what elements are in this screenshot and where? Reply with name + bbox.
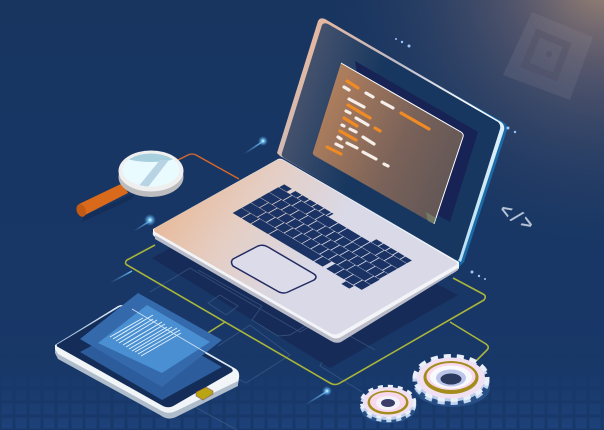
code lines orange: [327, 81, 429, 154]
tablet screen: [57, 307, 233, 407]
lens rim: [118, 150, 184, 197]
tablet body: [55, 305, 239, 416]
laptop deck: [154, 160, 457, 334]
yellow circuit traces: [126, 245, 488, 384]
lid frame highlight: [277, 18, 504, 262]
sparkles: [110, 136, 332, 405]
code window shadow: [355, 61, 478, 222]
front layer: [98, 305, 210, 373]
tablet screen edge highlight: [57, 307, 119, 344]
code symbol: </>: [495, 199, 537, 237]
glass highlight edge: [132, 309, 232, 368]
circuit lines: [150, 268, 375, 430]
laptop: [153, 18, 507, 343]
dots: [395, 38, 516, 280]
tablet: [55, 293, 239, 419]
trackpad: [232, 245, 316, 293]
lid outer rim: [277, 18, 507, 268]
magnifying glass: [76, 150, 184, 222]
orange connector line: [178, 154, 239, 179]
home button: [196, 387, 213, 400]
code window: [313, 63, 463, 224]
laptop shadow: [152, 196, 458, 368]
back layer: [80, 320, 222, 400]
document text lines: [110, 315, 181, 356]
keyboard: [230, 186, 410, 292]
laptop base edge: [153, 159, 459, 340]
code lines white: [336, 87, 393, 166]
small gear: [361, 387, 415, 423]
logo watermark top right: [503, 12, 593, 100]
pixel grid pattern at bottom: [2, 404, 604, 428]
middle layer: [80, 293, 222, 387]
large gear: [414, 357, 490, 407]
handle: [75, 183, 135, 222]
lid inner screen: [282, 23, 500, 260]
